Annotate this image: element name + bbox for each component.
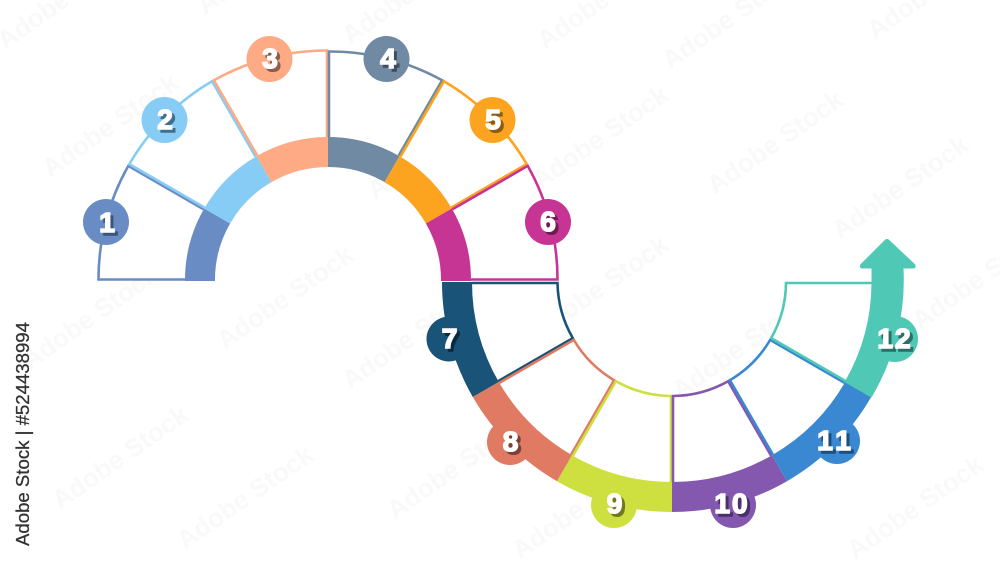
outline cell 6 [452,166,558,280]
outline cell 7 [472,283,573,381]
outline cell 11 [730,340,845,455]
badge 2 [142,97,188,143]
segment 7 [426,282,573,397]
band 8 [473,382,572,481]
text: Adobe Stock [381,409,529,525]
segment 9 [557,381,672,528]
band 5 [384,156,452,224]
text: Adobe Stock [36,67,184,183]
badge 7 [426,316,472,362]
badge 1 [83,199,129,245]
band 11 [772,382,871,481]
text: Adobe Stock [361,89,509,205]
outline cell 10 [673,381,771,482]
text: Adobe Stock [506,449,654,563]
text: Adobe Stock [701,84,849,200]
outline cell 2 [129,81,256,208]
number 10: 10 [714,488,750,519]
segment 2 [129,81,272,224]
outline cell 1 [98,166,204,280]
badge 4 [364,36,410,82]
number 1: 1 [102,210,118,241]
segment 3 [214,36,328,182]
segment 10 [672,381,787,528]
segment 1 [83,166,230,281]
badge 12 [872,316,918,362]
number 3: 3 [265,46,281,77]
segment 12 [771,240,918,397]
text: Adobe Stock [666,289,814,405]
outline cell 4 [329,51,442,156]
number 7: 7 [445,326,460,357]
band 4 [328,137,400,182]
number 9: 9 [607,488,622,519]
badge 11 [814,418,860,464]
number 1: 1 [99,207,115,238]
text: Adobe Stock [841,449,989,563]
outline cell 9 [573,381,671,482]
text: Adobe Stock [526,79,674,195]
number 8: 8 [503,426,518,457]
number 5: 5 [488,107,504,138]
number 9: 9 [610,491,625,522]
number 3: 3 [262,43,278,74]
text: Adobe Stock [826,129,974,245]
badge 6 [525,199,571,245]
outline cell 3 [214,50,327,156]
text: Adobe Stock [196,94,344,210]
number 4: 4 [380,43,396,74]
band 7 [442,282,499,397]
band 1 [185,208,230,281]
number 12: 12 [877,323,913,354]
band 3 [256,137,328,182]
number 6: 6 [543,209,559,240]
number 6: 6 [540,206,556,237]
outline cell 5 [400,81,527,208]
band 6 [426,208,471,281]
badge 3 [246,36,292,82]
outline cell 12 [771,283,873,381]
outline cell 8 [499,340,614,455]
number 4: 4 [383,46,399,77]
number 2: 2 [160,107,176,138]
band 12 with arrow [845,240,915,397]
number 8: 8 [506,429,521,460]
badge 10 [710,482,756,528]
number 2: 2 [157,104,173,135]
text: Adobe Stock [211,239,359,355]
text: Adobe Stock [46,399,194,515]
text: Adobe Stock [171,439,319,555]
badge 5 [470,97,516,143]
number 11: 11 [817,425,855,456]
number 10: 10 [717,491,753,522]
badge 9 [591,482,637,528]
band 9 [557,455,672,512]
segment 6 [426,166,571,281]
number 11: 11 [820,428,858,459]
text: Adobe Stock [336,279,484,395]
segment 11 [730,340,871,481]
badge 8 [487,419,533,465]
number 7: 7 [442,323,457,354]
band 10 [672,455,787,512]
stock id text: Adobe Stock | #524438994 [13,322,33,546]
number 12: 12 [880,326,916,357]
segment 8 [473,340,614,481]
number 5: 5 [485,104,501,135]
segment 5 [384,81,527,224]
band 2 [204,156,272,224]
text: Adobe Stock [526,229,674,345]
text: Adobe Stock [16,259,164,375]
segment 4 [328,36,442,182]
